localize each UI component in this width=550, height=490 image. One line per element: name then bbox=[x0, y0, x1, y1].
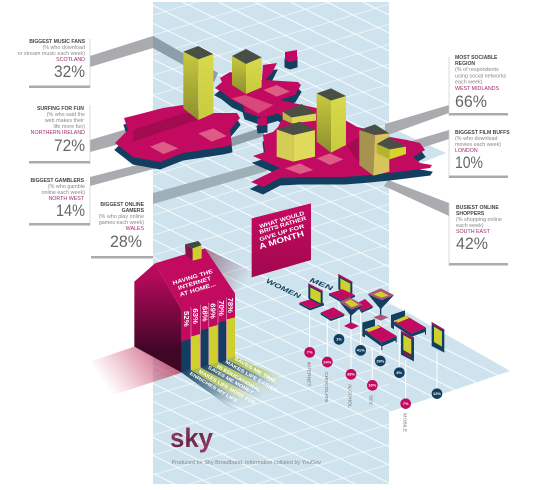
sign: what would Brits rather give up: GIVE UP FOR bbox=[259, 224, 305, 243]
ground stripes with statements: ENRICHES MY LIFE bbox=[189, 371, 239, 404]
sign: what would Brits rather give up bbox=[252, 203, 311, 277]
bar: Scotland bbox=[183, 46, 213, 120]
label: biggest online gamers: GAMERS bbox=[122, 208, 145, 214]
label: biggest music fans: SCOTLAND bbox=[56, 57, 85, 63]
label: biggest film buffs: movies each week) bbox=[455, 142, 501, 148]
bar: Wales bbox=[277, 122, 315, 162]
label: busiest online shoppers: BUSIEST ONLINE bbox=[456, 205, 499, 211]
icon: mobile women bbox=[401, 331, 414, 361]
label: surfing for fun: NORTHERN IRELAND bbox=[31, 130, 85, 136]
label: biggest gamblers: NORTH WEST bbox=[48, 196, 85, 202]
label: surfing for fun: life more fun) bbox=[54, 124, 85, 130]
label: biggest online gamers: BIGGEST ONLINE bbox=[100, 202, 145, 208]
label: surfing for fun: SURFING FOR FUN bbox=[37, 106, 84, 112]
bar: Northern Ireland bbox=[232, 49, 262, 94]
sign: what would Brits rather give up: WHAT WOULD bbox=[259, 211, 305, 230]
label: biggest gamblers bbox=[29, 178, 90, 226]
label: biggest music fans: BIGGEST MUSIC FANS bbox=[29, 39, 86, 45]
label: busiest online shoppers: SOUTH EAST bbox=[456, 229, 491, 235]
label: biggest gamblers: (% who gamble bbox=[48, 184, 85, 190]
chart columns bbox=[182, 297, 235, 373]
men values bbox=[334, 334, 442, 399]
house side wall bbox=[134, 263, 182, 373]
connector bands bbox=[90, 36, 449, 216]
icon: laptop men bbox=[329, 274, 355, 302]
bar: South East bbox=[359, 124, 389, 176]
label: surfing for fun bbox=[29, 105, 90, 164]
ground stripes with statements: IS EDUCATIONAL bbox=[216, 364, 262, 393]
sign: what would Brits rather give up: A MONTH bbox=[258, 229, 305, 251]
column percentages: 70% bbox=[217, 300, 226, 317]
label: biggest gamblers: online each week) bbox=[42, 190, 85, 196]
label: most sociable region: WEST MIDLANDS bbox=[455, 86, 500, 92]
label: most sociable region: (% of respondents bbox=[455, 67, 499, 73]
category labels: ALCOHOL bbox=[347, 384, 353, 408]
women values: 38% bbox=[347, 372, 355, 377]
label: biggest online gamers bbox=[91, 202, 153, 258]
column percentages: 63% bbox=[191, 308, 200, 325]
icon: chocolate men bbox=[357, 299, 373, 313]
icon: bed men bbox=[391, 310, 426, 339]
icon: laptop women bbox=[299, 283, 324, 310]
label: biggest online gamers: 28% bbox=[110, 232, 142, 251]
map top: pink land bbox=[115, 50, 432, 187]
ground stripes with statements: MAKES LIFE EASIER bbox=[224, 359, 279, 394]
men values: 8% bbox=[396, 370, 403, 375]
column percentages bbox=[182, 298, 235, 327]
map shading and highlighted regions bbox=[133, 85, 360, 174]
label: busiest online shoppers bbox=[449, 203, 508, 266]
men values: 41% bbox=[357, 348, 365, 353]
chart: what Brits would give up bbox=[265, 274, 444, 433]
house heading: HAVING THE bbox=[172, 269, 214, 287]
house heading: INTERNET bbox=[177, 276, 213, 292]
label: biggest film buffs: 10% bbox=[455, 153, 483, 172]
3D bars on map bbox=[183, 46, 406, 176]
bar: North West bbox=[283, 104, 316, 123]
background: isometric blue floor bbox=[153, 2, 510, 484]
column percentages: 78% bbox=[226, 298, 235, 313]
category labels bbox=[305, 362, 408, 433]
ground stripes with statements bbox=[182, 356, 290, 410]
label: biggest film buffs: (% who download bbox=[455, 136, 498, 142]
men values: 29% bbox=[376, 358, 385, 363]
chimney bbox=[185, 241, 202, 261]
drop lines bbox=[310, 300, 437, 402]
logo: sky: sky bbox=[170, 423, 213, 453]
category labels: SEX bbox=[367, 395, 373, 406]
women values: 24% bbox=[323, 359, 332, 364]
label: biggest music fans: 32% bbox=[54, 62, 85, 81]
house heading bbox=[172, 269, 217, 299]
icon: martini men bbox=[368, 288, 394, 321]
label: most sociable region: 66% bbox=[455, 92, 487, 111]
icon: mobile men bbox=[432, 322, 444, 353]
heading: women: WOMEN bbox=[265, 278, 302, 301]
women values: 7% bbox=[307, 350, 313, 355]
ground stripes with statements: SAVES ME MONEY bbox=[207, 365, 255, 396]
category labels: MOBILE bbox=[402, 413, 408, 433]
label: biggest gamblers: BIGGEST GAMBLERS bbox=[30, 178, 85, 184]
label: biggest online gamers: (% who play online bbox=[99, 214, 144, 220]
label: most sociable region: using social networks bbox=[455, 74, 507, 80]
label: surfing for fun: web makes their bbox=[44, 118, 84, 124]
label: biggest music fans: or stream music each week) bbox=[18, 51, 85, 57]
house shadows bbox=[90, 347, 182, 395]
label: busiest online shoppers: 42% bbox=[456, 234, 488, 253]
men values: 1% bbox=[336, 337, 342, 342]
heading: men: MEN bbox=[309, 277, 334, 293]
label: biggest gamblers: 14% bbox=[56, 201, 85, 220]
map: UK and Ireland bbox=[115, 50, 432, 194]
label: biggest music fans: (% who download bbox=[42, 45, 85, 51]
label: most sociable region: REGION bbox=[455, 61, 475, 67]
women values bbox=[304, 347, 411, 409]
bar: West Midlands bbox=[317, 88, 346, 153]
house chart: having the internet at home bbox=[90, 241, 290, 410]
house heading: AT HOME... bbox=[179, 282, 217, 299]
label: biggest music fans bbox=[18, 39, 90, 88]
label: busiest online shoppers: SHOPPERS bbox=[456, 211, 485, 217]
sign: what would Brits rather give up: BRITS RATHER bbox=[259, 216, 307, 236]
column percentages: 68% bbox=[200, 306, 209, 322]
men values: 12% bbox=[433, 391, 441, 396]
label: most sociable region: MOST SOCIABLE bbox=[455, 55, 498, 61]
label: busiest online shoppers: each week) bbox=[456, 223, 484, 229]
category labels: INTERNET bbox=[305, 362, 311, 387]
icon: chocolate women bbox=[321, 307, 344, 321]
label: biggest film buffs bbox=[449, 129, 510, 178]
column percentages: 52% bbox=[182, 311, 191, 327]
label: biggest film buffs: LONDON bbox=[455, 148, 478, 154]
column percentages: 69% bbox=[209, 303, 218, 319]
label: biggest online gamers: WALES bbox=[126, 226, 144, 232]
label: biggest online gamers: games each week) bbox=[99, 220, 144, 226]
label: most sociable region bbox=[449, 55, 508, 116]
label: surfing for fun: (% who said the bbox=[47, 112, 85, 118]
women values: 16% bbox=[368, 383, 377, 388]
icon: martini women bbox=[339, 297, 363, 329]
map side: navy extrusion bbox=[115, 57, 432, 194]
label: most sociable region: each week) bbox=[455, 80, 483, 86]
ground stripes with statements: SAVES ME TIME bbox=[233, 356, 277, 384]
women values: 7% bbox=[403, 401, 409, 406]
category labels: CHOCOLATE bbox=[323, 372, 329, 403]
label: biggest film buffs: BIGGEST FILM BUFFS bbox=[455, 130, 510, 136]
label: busiest online shoppers: (% shopping online bbox=[456, 217, 502, 223]
icon: bed women bbox=[362, 319, 397, 350]
ground stripes with statements: MAKES LIFE MORE FUN bbox=[198, 369, 257, 406]
credit line: Produced for Sky Broadband. Information collated by YouGov bbox=[172, 460, 321, 466]
bar: London bbox=[377, 137, 406, 159]
house front bbox=[155, 248, 235, 373]
label: surfing for fun: 72% bbox=[54, 136, 85, 155]
